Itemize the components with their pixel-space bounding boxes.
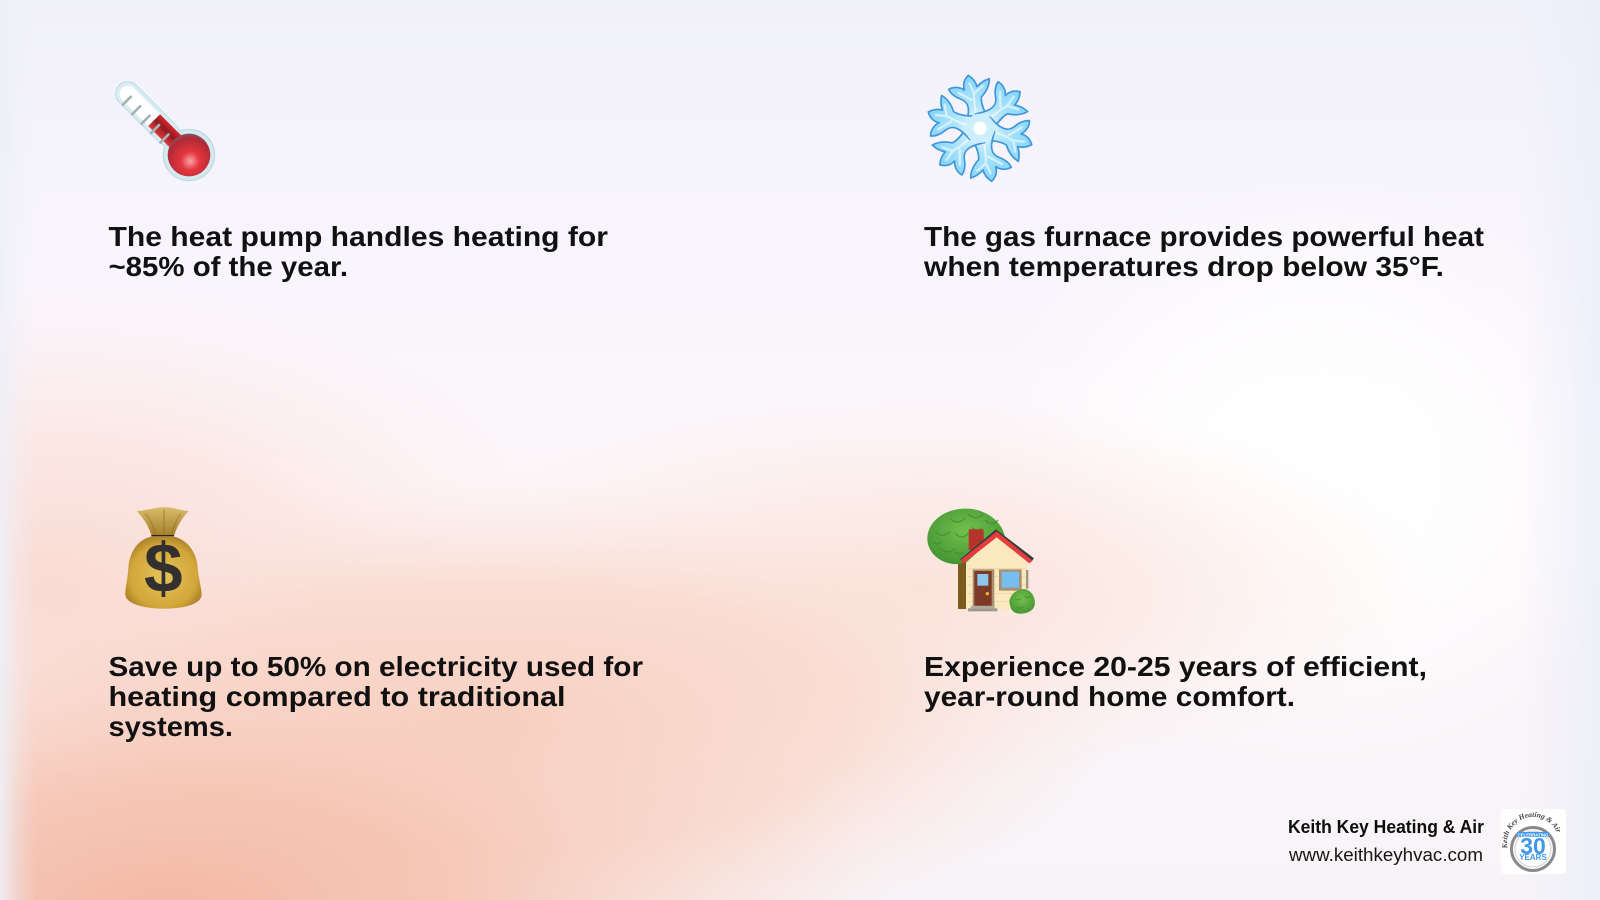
logo: 30 years badge: Keith Key Heating & Air <box>1502 812 1560 848</box>
logo: 30 years badge: CELEBRATING <box>1518 832 1549 837</box>
text: heat pump: ~85% of the year. <box>108 251 348 282</box>
text: gas furnace: when temperatures drop below 35°F. <box>923 251 1444 282</box>
text: comfort: year-round home comfort. <box>924 681 1295 712</box>
icon: house with tree <box>927 509 1035 614</box>
website: www.keithkeyhvac.com <box>1288 845 1483 865</box>
icon: snowflake <box>918 75 1042 182</box>
text: savings: Save up to 50% on electricity used for <box>108 651 643 682</box>
text: heat pump: The heat pump handles heating for <box>108 221 608 252</box>
panel: gas furnace <box>918 75 1492 282</box>
panel: savings <box>108 507 651 742</box>
panel: heat pump <box>101 67 616 282</box>
logo: 30 years badge: 30 <box>1520 833 1546 859</box>
text: savings: systems. <box>108 711 233 742</box>
footer: company brand <box>1288 809 1566 874</box>
logo: 30 years badge: YEARS <box>1519 853 1547 862</box>
icon: thermometer <box>101 67 225 191</box>
icon: money bag <box>125 507 202 609</box>
icon: money bag: $ <box>144 529 183 607</box>
logo: 30 years badge <box>1501 809 1566 874</box>
panel: comfort <box>924 509 1435 712</box>
company name: Keith Key Heating & Air <box>1288 817 1484 837</box>
text: comfort: Experience 20-25 years of efficient, <box>924 651 1427 682</box>
text: gas furnace: The gas furnace provides powerful heat <box>924 221 1484 252</box>
text: savings: heating compared to traditional <box>108 681 566 712</box>
